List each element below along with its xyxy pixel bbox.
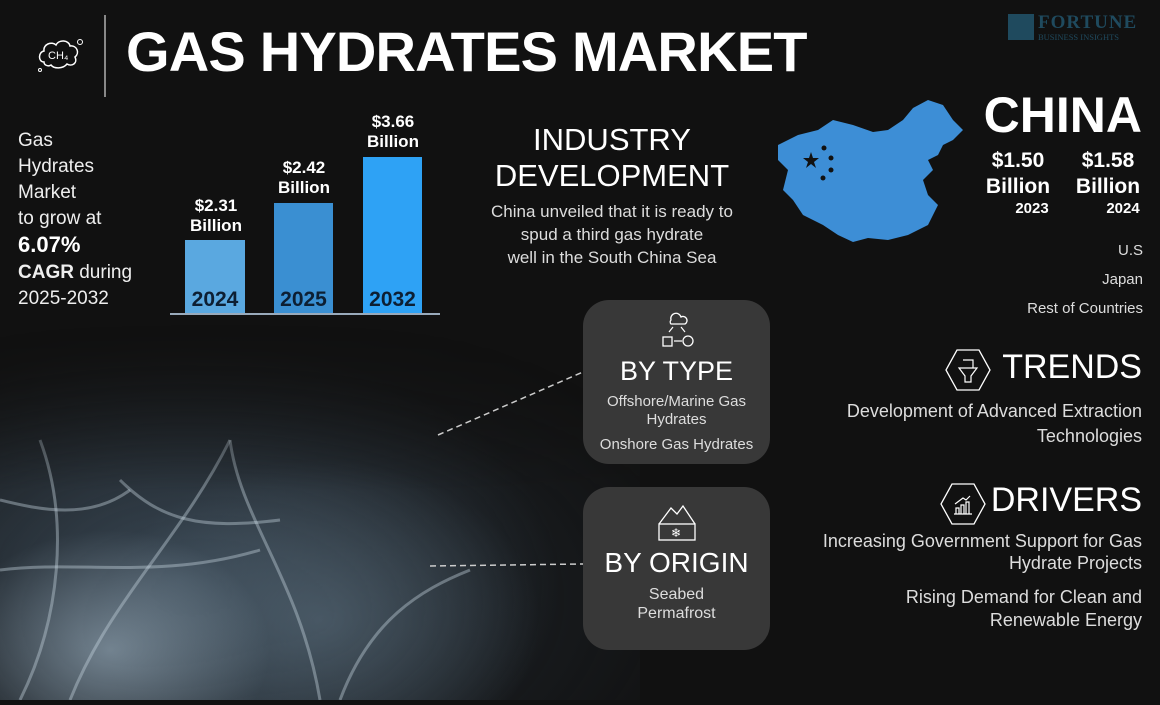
other countries: U.S <box>1118 242 1143 259</box>
trends: Development of Advanced Extraction <box>847 401 1142 421</box>
bar chart: $3.66 <box>372 112 414 131</box>
bar chart: $2.31 <box>195 196 237 215</box>
panel: by type <box>583 300 770 464</box>
industry development: INDUSTRY <box>533 122 691 157</box>
panel: by origin: BY ORIGIN <box>604 547 749 578</box>
text: CAGR: 6.07% <box>18 232 80 257</box>
text: CAGR: 2025-2032 <box>18 288 109 309</box>
text: Billion <box>1076 175 1140 198</box>
map: China <box>778 100 963 242</box>
panel: by type: Onshore Gas Hydrates <box>600 436 753 453</box>
industry development: China unveiled that it is ready to <box>491 202 733 221</box>
industry development: well in the South China Sea <box>508 248 716 267</box>
bar chart: 2032 <box>369 288 416 311</box>
panel: by type: Hydrates <box>646 411 707 428</box>
bar chart: 2025 <box>280 288 327 311</box>
text: CAGR: Hydrates <box>18 156 94 177</box>
icon: trends hex <box>945 349 991 391</box>
trends: Technologies <box>1037 426 1142 446</box>
drivers: Renewable Energy <box>990 610 1142 630</box>
title: GAS HYDRATES MARKET <box>126 20 807 83</box>
drivers <box>823 481 1142 630</box>
other countries: Japan <box>1102 271 1143 288</box>
bar chart: Billion <box>367 132 419 151</box>
text: CAGR: Market <box>18 182 76 203</box>
dashed connectors <box>430 372 583 567</box>
icon: CH4 cloud <box>38 39 83 72</box>
industry development: DEVELOPMENT <box>495 158 729 193</box>
panel: by origin <box>583 487 770 650</box>
trends <box>847 348 1142 446</box>
logo: FORTUNE <box>1038 12 1137 33</box>
icon: type cycle <box>662 312 694 347</box>
logo: BUSINESS INSIGHTS <box>1038 32 1119 42</box>
drivers: Rising Demand for Clean and <box>906 587 1142 607</box>
bar chart: Billion <box>190 216 242 235</box>
icon: CH4 cloud: CH₄ <box>48 50 69 62</box>
text: CAGR: to grow at <box>18 208 101 229</box>
panel: by type: Offshore/Marine Gas <box>607 393 746 410</box>
industry development: spud a third gas hydrate <box>521 225 703 244</box>
text: $1.50 <box>992 149 1044 172</box>
logo <box>1008 12 1137 42</box>
text: Billion <box>986 175 1050 198</box>
text: 2024 <box>1106 200 1140 217</box>
bar chart: $2.42 <box>283 158 325 177</box>
drivers: Increasing Government Support for Gas <box>823 531 1142 551</box>
other countries: Rest of Countries <box>1027 300 1143 317</box>
panel: by type: BY TYPE <box>620 356 733 386</box>
icon: seabed: ❄ <box>670 526 681 540</box>
text: 2023 <box>1015 200 1049 217</box>
bar chart <box>170 112 440 315</box>
icon: seabed <box>658 505 696 541</box>
text: CAGR <box>18 130 132 309</box>
drivers: DRIVERS <box>991 481 1142 519</box>
text: CAGR: CAGR during <box>18 262 132 283</box>
bar chart: Billion <box>278 178 330 197</box>
panel: by origin: Seabed <box>649 586 704 603</box>
text: $1.58 <box>1082 149 1134 172</box>
panel: by origin: Permafrost <box>637 605 716 622</box>
china stats: CHINA <box>984 87 1142 143</box>
trends: TRENDS <box>1002 348 1142 386</box>
background: ice image <box>0 393 586 700</box>
bar chart: 2024 <box>192 288 238 311</box>
text: CAGR: Gas <box>18 130 53 151</box>
other countries <box>1027 242 1143 317</box>
drivers: Hydrate Projects <box>1009 553 1142 573</box>
industry development <box>491 122 733 267</box>
icon: drivers hex <box>940 483 986 525</box>
